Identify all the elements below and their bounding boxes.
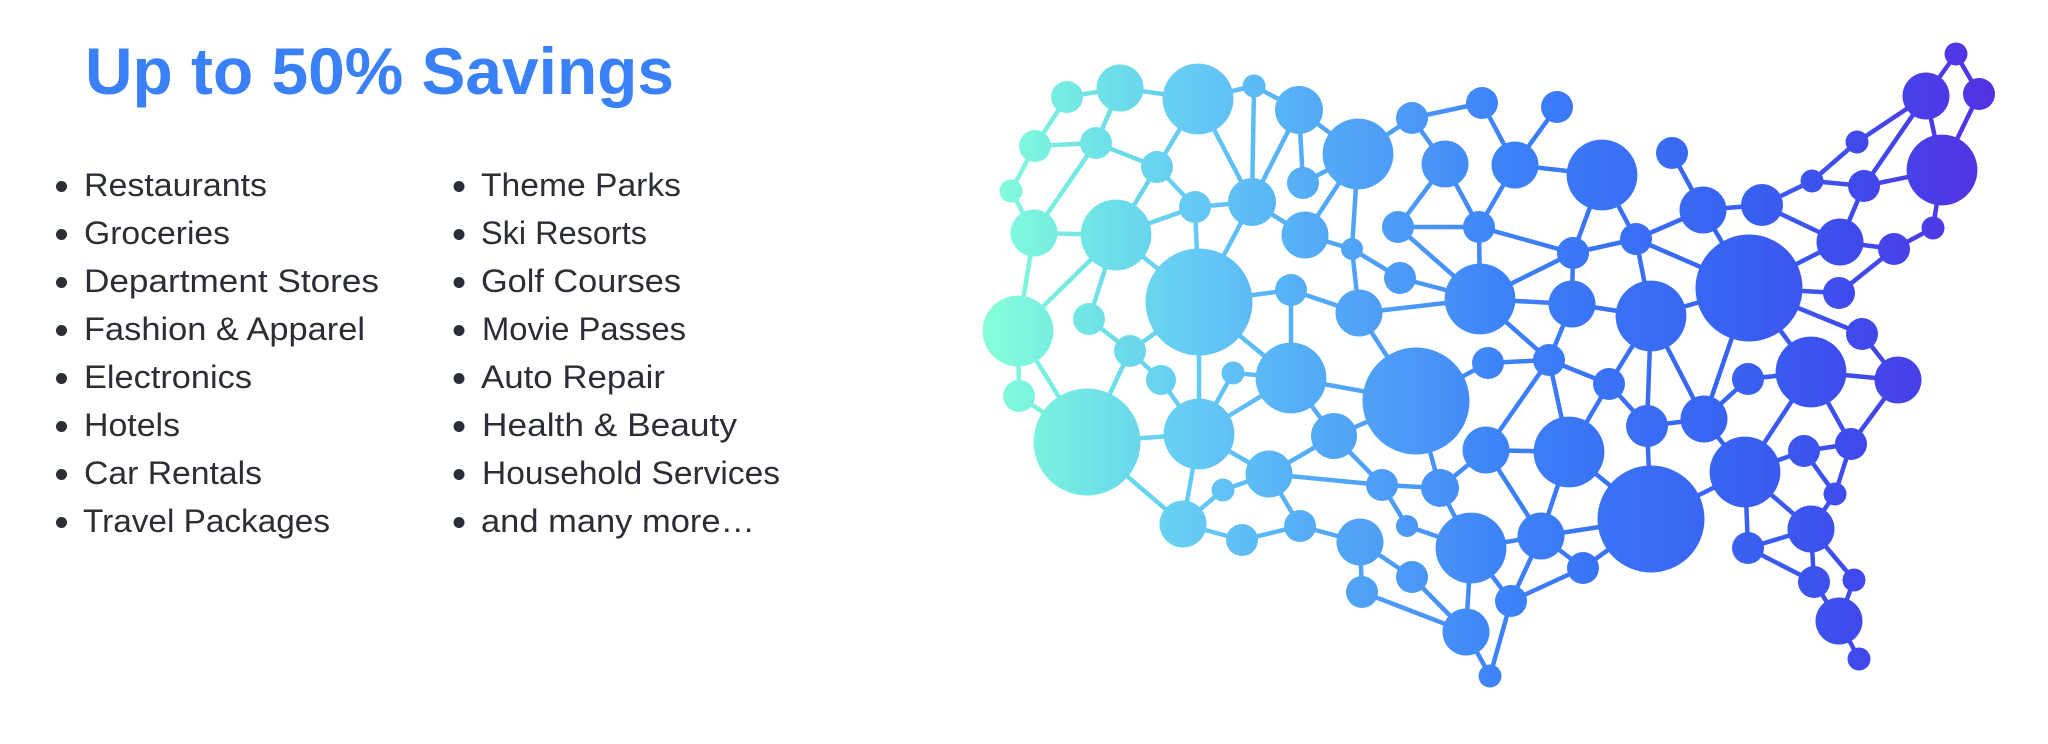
list: right column: Theme Parks (481, 167, 681, 203)
list: right column: Golf Courses (481, 263, 681, 299)
list: left column: Department Stores (84, 263, 379, 299)
list: right column: Ski Resorts (481, 215, 647, 251)
list: right column: Auto Repair (481, 359, 665, 395)
network nodes (983, 42, 1995, 688)
list: right column: and many more… (481, 503, 755, 539)
list: left column: Electronics (84, 359, 252, 395)
list: right column: Health & Beauty (482, 407, 737, 443)
list: left column: Fashion & Apparel (84, 311, 365, 347)
list: left column: Car Rentals (84, 455, 262, 491)
list: left column: Hotels (84, 407, 180, 443)
list: left column: Travel Packages (83, 503, 330, 539)
network connections (1011, 54, 1979, 676)
list: right column (454, 167, 780, 539)
list: left column (56, 167, 379, 539)
title: Up to 50% Savings (85, 34, 674, 108)
network map of the United States (983, 42, 1995, 688)
list: left column: Groceries (84, 215, 230, 251)
list: right column: Movie Passes (482, 311, 686, 347)
list: right column: Household Services (482, 455, 780, 491)
list: left column: Restaurants (84, 167, 267, 203)
